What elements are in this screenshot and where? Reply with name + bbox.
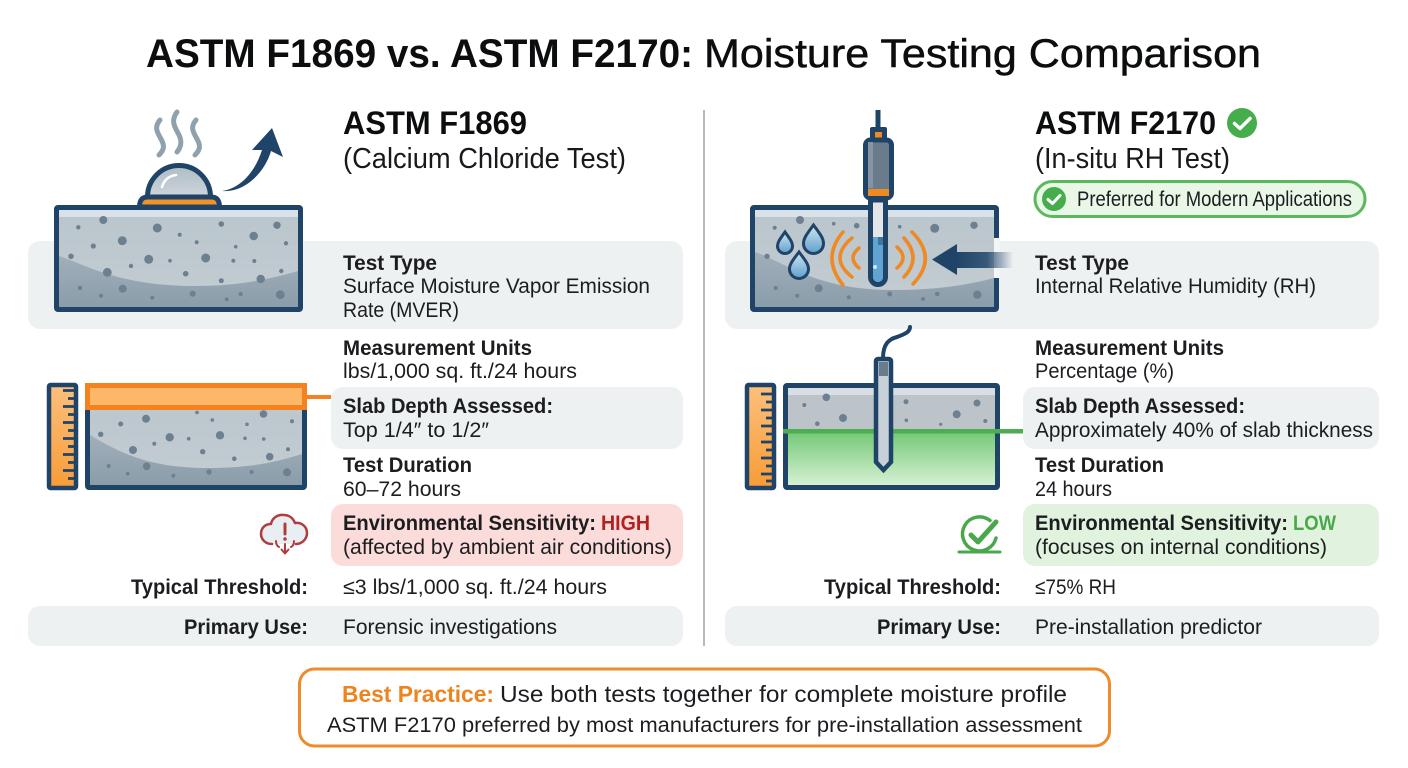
icon: dome bbox=[140, 166, 220, 207]
text: environmental sensitivity high: HIGH bbox=[601, 512, 650, 535]
text: primary use: Pre-installation predictor bbox=[1035, 616, 1262, 639]
text: environmental sensitivity low bbox=[1035, 512, 1336, 559]
panel: ASTM F1869 bbox=[28, 105, 683, 646]
text: primary use bbox=[877, 616, 1262, 639]
panel: ASTM F2170 bbox=[725, 105, 1379, 646]
badge: preferred for modern applications bbox=[1035, 182, 1365, 216]
text: test duration: Test Duration bbox=[343, 454, 472, 477]
icon: water drops bbox=[778, 225, 824, 278]
callout: best practice bbox=[300, 669, 1110, 746]
heading: ASTM F1869: ASTM F1869 bbox=[343, 105, 527, 141]
text: slab depth assessed bbox=[343, 395, 553, 442]
icon: RH probe bbox=[866, 110, 892, 284]
text: slab depth assessed: Slab Depth Assessed: bbox=[343, 395, 553, 418]
row background: primary use bbox=[28, 606, 683, 646]
text: slab depth assessed bbox=[1035, 395, 1373, 442]
icon: green check on base bbox=[959, 517, 1000, 552]
text: primary use: Forensic investigations bbox=[343, 616, 557, 639]
text: measurement units bbox=[1035, 337, 1224, 383]
heading: ASTM F1869: (Calcium Chloride Test) bbox=[343, 143, 626, 175]
heading: ASTM F2170: ASTM F2170 bbox=[1035, 105, 1216, 141]
heading: ASTM F2170: (In-situ RH Test) bbox=[1035, 143, 1230, 175]
text: test type: Internal Relative Humidity (RH) bbox=[1035, 275, 1316, 298]
callout: best practice: Best Practice: bbox=[342, 681, 494, 707]
text: test type: Test Type bbox=[343, 252, 437, 275]
text: slab depth assessed: Approximately 40% of slab thickness bbox=[1035, 419, 1373, 442]
row background: test type bbox=[725, 241, 1379, 329]
illustration: probe at 40% depth bbox=[783, 327, 1023, 488]
text: test duration bbox=[343, 454, 472, 501]
title: ASTM F1869 vs. ASTM F2170: bbox=[146, 32, 693, 76]
text: measurement units bbox=[343, 337, 577, 383]
icon: orange signal waves bbox=[832, 232, 925, 285]
row background: environmental sensitivity low bbox=[1023, 504, 1379, 566]
text: test type: Test Type bbox=[1035, 252, 1129, 275]
heading: ASTM F1869 bbox=[343, 105, 626, 175]
illustration: slab with top layer highlighted bbox=[88, 386, 331, 488]
text: typical threshold bbox=[824, 576, 1116, 599]
text: measurement units: lbs/1,000 sq. ft./24 hours bbox=[343, 360, 577, 383]
badge: preferred for modern applications: Preferred for Modern Applications bbox=[1077, 188, 1352, 211]
text: slab depth assessed: Top 1/4″ to 1/2″ bbox=[343, 419, 490, 442]
text: test type: Rate (MVER) bbox=[343, 299, 459, 322]
text: primary use: Primary Use: bbox=[184, 616, 308, 639]
divider between columns bbox=[703, 110, 705, 646]
icon: ruler bbox=[49, 385, 76, 488]
heading: ASTM F2170 bbox=[1035, 105, 1230, 175]
text: typical threshold: ≤3 lbs/1,000 sq. ft./24 hours bbox=[343, 576, 607, 599]
text: test type bbox=[343, 252, 650, 322]
text: measurement units: Percentage (%) bbox=[1035, 360, 1174, 383]
callout: best practice: ASTM F2170 preferred by most manufacturers for pre-installation assessment bbox=[327, 714, 1082, 737]
text: test duration: 60–72 hours bbox=[343, 478, 461, 501]
text: test duration: Test Duration bbox=[1035, 454, 1164, 477]
text: environmental sensitivity high: (affected by ambient air conditions) bbox=[343, 536, 672, 559]
text: environmental sensitivity high bbox=[343, 512, 672, 559]
text: test duration: 24 hours bbox=[1035, 478, 1112, 501]
text: primary use: Primary Use: bbox=[877, 616, 1001, 639]
text: test type: Surface Moisture Vapor Emission bbox=[343, 275, 650, 298]
text: measurement units: Measurement Units bbox=[1035, 337, 1224, 360]
text: environmental sensitivity low: Environmental Sensitivity: bbox=[1035, 512, 1288, 535]
icon: vapor wisps bbox=[157, 112, 199, 155]
callout: best practice: Use both tests together for complete moisture profile bbox=[500, 681, 1067, 707]
title: Moisture Testing Comparison bbox=[704, 32, 1261, 76]
text: typical threshold bbox=[131, 576, 607, 599]
text: typical threshold: Typical Threshold: bbox=[131, 576, 308, 599]
gap in slab wall bbox=[994, 238, 1000, 278]
slab cross-section bbox=[752, 208, 996, 310]
text: test type bbox=[1035, 252, 1316, 298]
text: environmental sensitivity high: Environmental Sensitivity: bbox=[343, 512, 596, 535]
icon: green check badge bbox=[1227, 108, 1257, 138]
text: typical threshold: ≤75% RH bbox=[1035, 576, 1116, 599]
icon: rising arrow bbox=[222, 128, 283, 191]
row background: slab depth bbox=[1023, 387, 1379, 449]
text: slab depth assessed: Slab Depth Assessed: bbox=[1035, 395, 1245, 418]
icon: ruler bbox=[747, 385, 774, 488]
text: typical threshold: Typical Threshold: bbox=[824, 576, 1001, 599]
illustration: calcium chloride dome on slab bbox=[56, 112, 300, 310]
illustration: in-situ probe in slab bbox=[752, 110, 1013, 310]
row background: slab depth bbox=[331, 387, 683, 449]
text: environmental sensitivity low: LOW bbox=[1293, 512, 1336, 535]
title bbox=[146, 32, 1261, 76]
icon: cloud warning bbox=[261, 515, 307, 554]
text: primary use bbox=[184, 616, 557, 639]
text: measurement units: Measurement Units bbox=[343, 337, 532, 360]
row background: environmental sensitivity high bbox=[331, 504, 683, 566]
row background: primary use bbox=[725, 606, 1379, 646]
text: test duration bbox=[1035, 454, 1164, 501]
icon: inward arrow bbox=[932, 244, 1013, 275]
text: environmental sensitivity low: (focuses on internal conditions) bbox=[1035, 536, 1327, 559]
row background: test type bbox=[28, 241, 683, 329]
slab cross-section bbox=[56, 208, 300, 310]
